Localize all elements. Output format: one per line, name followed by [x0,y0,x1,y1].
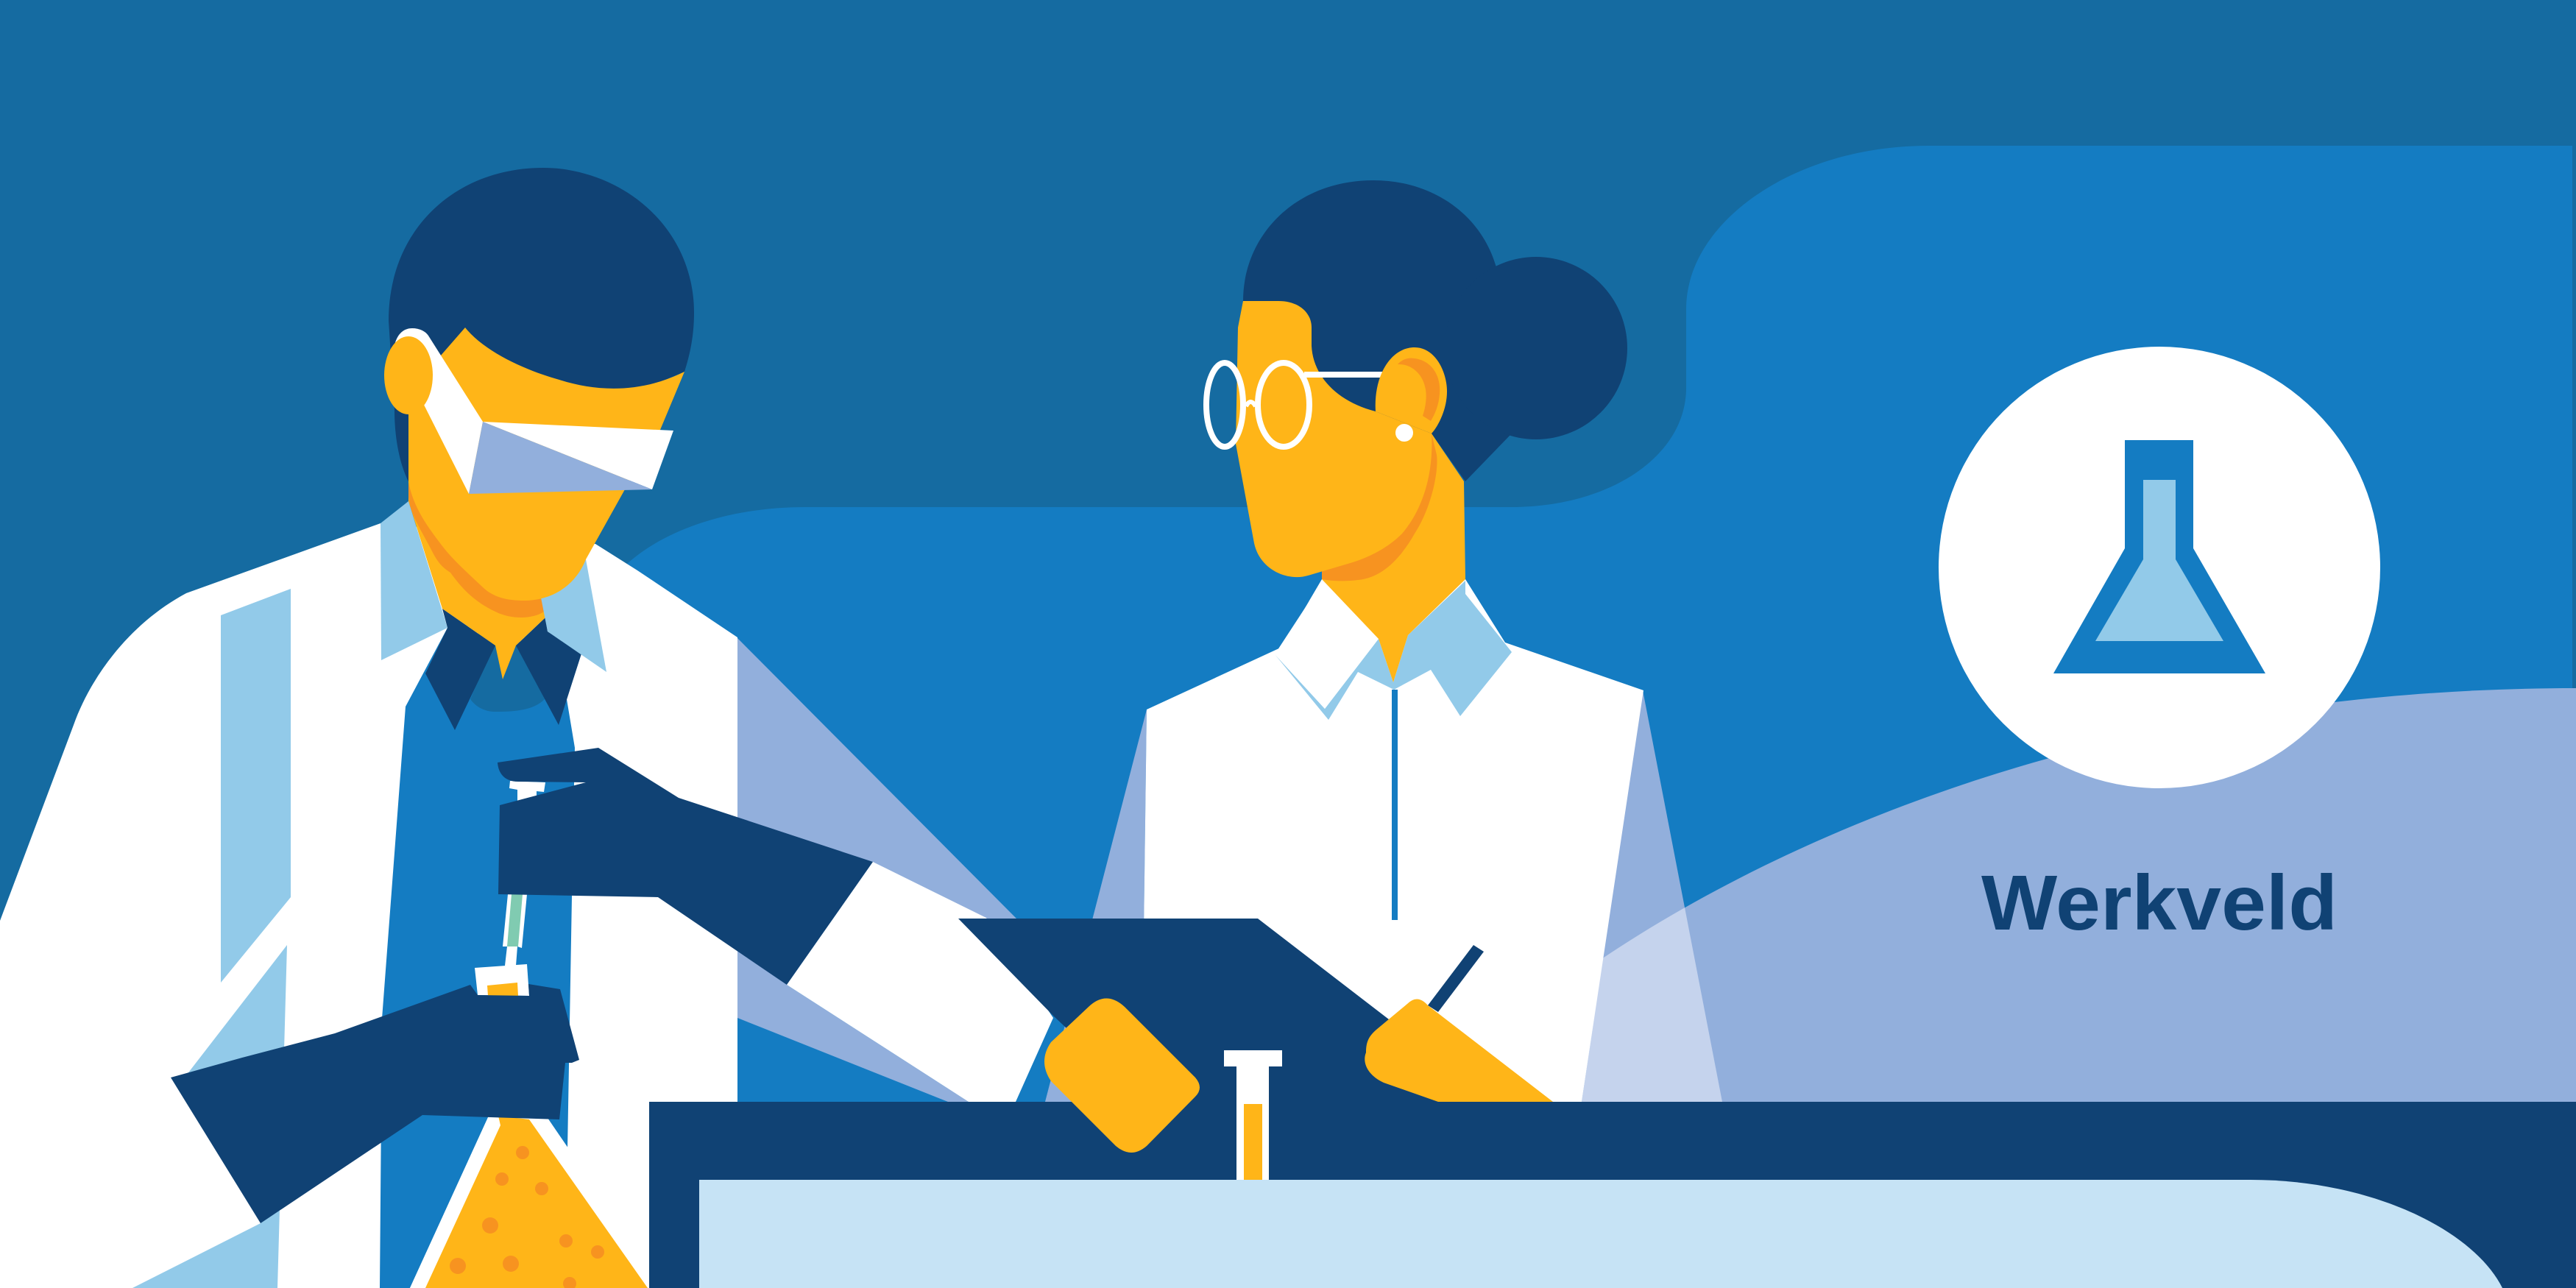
woman: collar lapel [1275,581,1512,720]
label: Werkveld: Werkveld [1981,860,2338,946]
man: goggle lens [469,422,652,494]
hand: right [1365,999,1553,1102]
man: goggle strap [394,328,483,494]
test tube: body [1236,1066,1269,1180]
man: face [408,328,684,601]
table inner panel [699,1180,2502,1288]
woman: glasses temple [1304,372,1382,378]
test tube: liquid [1244,1104,1262,1180]
woman: back shadow overlap with hill [1582,908,1722,1102]
man: collar right [541,559,606,672]
man: upper arm glove [498,748,873,985]
flask outer [2053,440,2265,673]
woman: inner ear [1398,358,1440,421]
man: hair [389,168,694,515]
woman: hair [1243,180,1627,481]
man: lab coat [0,523,737,1288]
woman: glasses [1206,363,1309,447]
pipette: tube [503,894,527,966]
background: periwinkle curved hill [1604,688,2576,1102]
man: tie right [516,618,581,725]
icon circle [1939,347,2380,788]
man: rear coat shadow [737,638,1016,1102]
woman: back shadow on left side [1045,710,1147,1102]
clipboard [958,919,1440,1102]
man: coat panel upper [221,589,291,983]
pipette [475,781,545,996]
man: blue shirt [380,628,581,1288]
pipette: green liquid [507,894,523,946]
vial [475,964,529,996]
woman: neck [1322,434,1465,682]
man: flask outline [410,1116,664,1288]
lab table [649,1102,2576,1288]
pipette: top cap [509,781,545,801]
man: tie left [425,609,495,730]
woman: earring [1395,424,1413,442]
man: shirt shadow [470,640,545,712]
woman scientist [1142,180,1643,1102]
woman: white collar [1275,582,1379,709]
man: sleeve [787,862,1053,1102]
man: lower arm glove [171,984,579,1223]
flask bubbles [450,1146,604,1288]
woman: ear [1376,347,1447,434]
background: blue rounded shape [515,146,2576,1288]
man scientist [0,168,1016,1288]
test tube [1224,1050,1282,1180]
man: goggle lens highlight [483,422,673,489]
man: neck shadow [408,482,544,618]
woman: back shadow on right side [1582,690,1722,1102]
man: flask liquid [425,1116,648,1288]
woman: neck shadow [1322,434,1437,581]
test tube: cap [1224,1050,1282,1066]
woman: zipper [1392,690,1398,920]
man: ear [384,336,433,414]
vial liquid [487,983,518,996]
hand: left [1044,998,1200,1153]
man: collar left [381,501,447,660]
icon: flask in circle [1939,347,2380,788]
man: neck [408,482,545,679]
woman: pen [1428,945,1484,1012]
man: coat panel lower [132,945,287,1288]
woman: lab coat [1142,579,1643,1102]
woman: face [1236,301,1432,577]
flask inner [2095,480,2223,641]
